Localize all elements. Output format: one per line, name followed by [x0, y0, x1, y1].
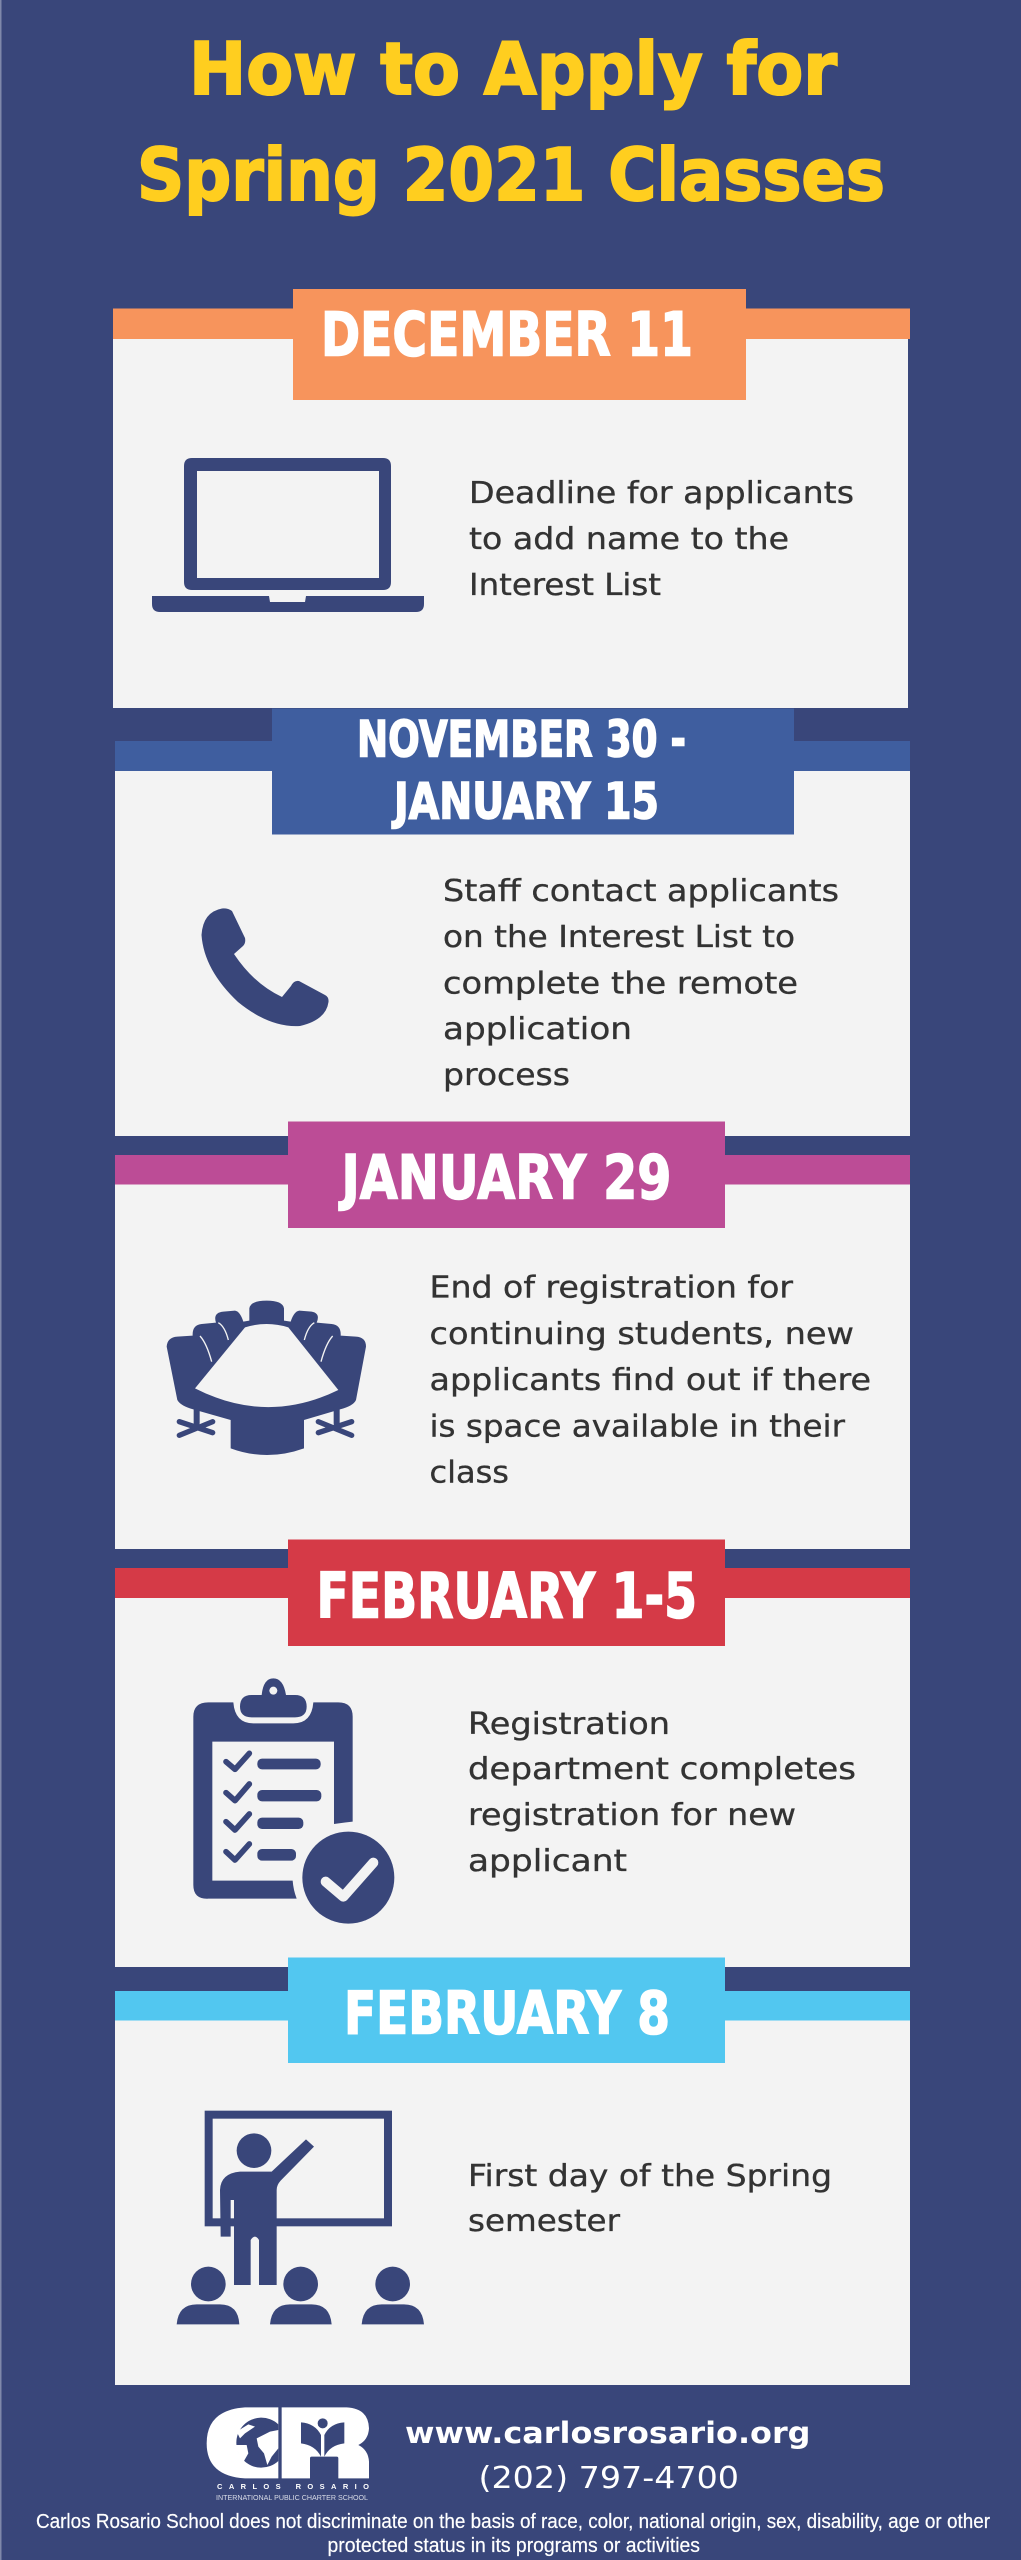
- description: November 30 - January 15: on the Interest List to: [443, 920, 795, 955]
- icon: phone: [202, 908, 329, 1026]
- disclaimer: Carlos Rosario School does not discriminate on the basis of race, color, national origin, sex, disability, age or other: [36, 2511, 990, 2533]
- description: December 11: to add name to the: [469, 522, 789, 557]
- description: January 29: class: [430, 1456, 509, 1490]
- description: February 1-5: applicant: [468, 1844, 627, 1879]
- description: December 11: Interest List: [469, 568, 661, 603]
- description: January 29: [430, 1270, 871, 1490]
- description: January 29: End of registration for: [430, 1270, 793, 1306]
- panel: February 1-5: [115, 1540, 910, 1967]
- description: November 30 - January 15: process: [443, 1058, 570, 1093]
- description: February 1-5: Registration: [468, 1707, 670, 1742]
- logo: Carlos Rosario: [207, 2407, 369, 2502]
- date heading: January 29: JANUARY 29: [338, 1142, 672, 1214]
- date heading: December 11: DECEMBER 11: [321, 300, 693, 370]
- icon: clipboard with checkmark: [193, 1678, 394, 1924]
- logo: Carlos Rosario: INTERNATIONAL PUBLIC CHARTER SCHOOL: [216, 2495, 368, 2502]
- description: February 8: semester: [468, 2204, 620, 2239]
- description: January 29: applicants find out if there: [430, 1363, 871, 1398]
- description: January 29: continuing students, new: [430, 1317, 854, 1352]
- description: November 30 - January 15: [443, 874, 839, 1093]
- description: February 1-5: registration for new: [468, 1798, 796, 1833]
- date heading: November 30 - January 15: JANUARY 15: [392, 772, 659, 830]
- description: December 11: Deadline for applicants: [469, 476, 854, 511]
- description: January 29: is space available in their: [430, 1410, 845, 1444]
- description: February 8: First day of the Spring: [468, 2159, 832, 2194]
- panel: February 8: [115, 1958, 910, 2385]
- date heading: November 30 - January 15: NOVEMBER 30 -: [357, 710, 686, 768]
- description: December 11: [469, 476, 854, 603]
- phone number: (202) 797-4700: [478, 2461, 739, 2496]
- title: Spring 2021 Classes: [137, 133, 885, 217]
- date heading: November 30 - January 15: [357, 710, 686, 830]
- website: www.carlosrosario.org: [405, 2416, 810, 2450]
- description: February 8: [468, 2159, 832, 2239]
- icon: teacher and students: [177, 2115, 424, 2324]
- icon: conference table: [167, 1301, 366, 1455]
- date heading: February 8: FEBRUARY 8: [344, 1978, 670, 2048]
- title: How to Apply for: [189, 27, 837, 111]
- title: [137, 27, 885, 217]
- description: November 30 - January 15: application: [443, 1012, 632, 1047]
- description: November 30 - January 15: complete the remote: [443, 966, 798, 1002]
- panel: December 11: [113, 289, 910, 708]
- disclaimer: [36, 2511, 990, 2557]
- date heading: February 1-5: FEBRUARY 1-5: [316, 1560, 697, 1632]
- footer: [36, 2407, 990, 2557]
- panel: January 29: [115, 1122, 910, 1550]
- icon: laptop: [152, 458, 424, 612]
- description: February 1-5: [468, 1707, 856, 1879]
- description: February 1-5: department completes: [468, 1752, 856, 1787]
- panel: November 30 - January 15: [115, 708, 910, 1137]
- description: November 30 - January 15: Staff contact applicants: [443, 874, 839, 909]
- disclaimer: protected status in its programs or activities: [328, 2535, 700, 2557]
- logo: Carlos Rosario: CARLOS ROSARIO: [217, 2482, 369, 2491]
